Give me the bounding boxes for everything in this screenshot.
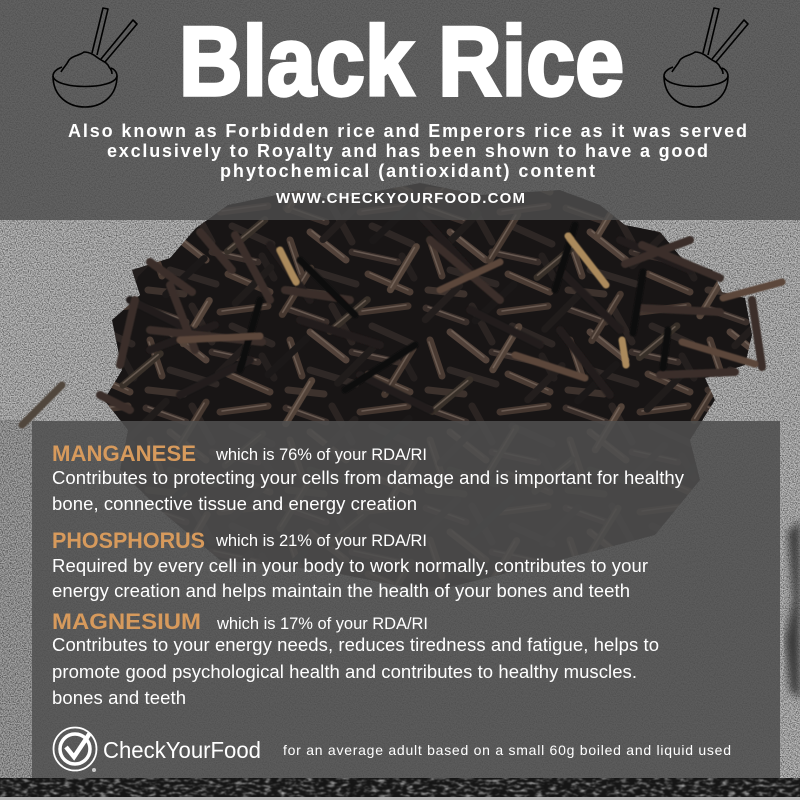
nutrient: phosphorus: energy creation and helps maintain the health of your bones and teeth: [52, 580, 630, 601]
nutrient: magnesium: Contributes to your energy needs, reduces tiredness and fatigue, helps to: [52, 634, 659, 655]
subtitle text block: [68, 121, 747, 181]
logo: CheckYourFood: CheckYourFood: [103, 737, 261, 763]
bottom dark strip: [0, 778, 800, 800]
nutrient: magnesium: MAGNESIUM: [52, 609, 201, 634]
footnote: for an average adult based on a small 60g boiled and liquid used: [283, 742, 731, 758]
information panel: [32, 421, 780, 778]
nutrient: manganese: MANGANESE: [52, 441, 196, 466]
nutrient: phosphorus: PHOSPHORUS: [52, 528, 205, 553]
title: Black Rice: [179, 6, 624, 116]
icon: rice bowl with chopsticks (left): [53, 8, 137, 107]
nutrient: manganese: [52, 441, 685, 514]
top band: [0, 0, 800, 220]
icon: rice bowl with chopsticks (right): [664, 8, 748, 107]
nutrient: manganese: Contributes to protecting your cells from damage and is important for healthy: [52, 467, 685, 488]
subtitle text block: phytochemical (antioxidant) content: [220, 161, 595, 181]
nutrient: phosphorus: Required by every cell in your body to work normally, contributes to your: [52, 555, 648, 576]
photo: pile of black rice: [22, 183, 782, 592]
subtitle text block: exclusively to Royalty and has been shown to have a good: [107, 141, 708, 161]
logo: CheckYourFood: [54, 728, 261, 772]
subtitle text block: Also known as Forbidden rice and Emperors rice as it was served: [68, 121, 747, 141]
nutrient: phosphorus: [52, 528, 648, 601]
nutrient: magnesium: bones and teeth: [52, 687, 186, 708]
nutrient: manganese: bone, connective tissue and energy creation: [52, 493, 417, 514]
nutrient: magnesium: [52, 609, 659, 708]
nutrient: manganese: which is 76% of your RDA/RI: [215, 446, 427, 464]
website url: WWW.CHECKYOURFOOD.COM: [276, 190, 525, 207]
nutrient: phosphorus: which is 21% of your RDA/RI: [215, 532, 427, 550]
nutrient: magnesium: promote good psychological health and contributes to healthy muscles.: [52, 661, 637, 682]
nutrient: magnesium: which is 17% of your RDA/RI: [216, 615, 428, 633]
